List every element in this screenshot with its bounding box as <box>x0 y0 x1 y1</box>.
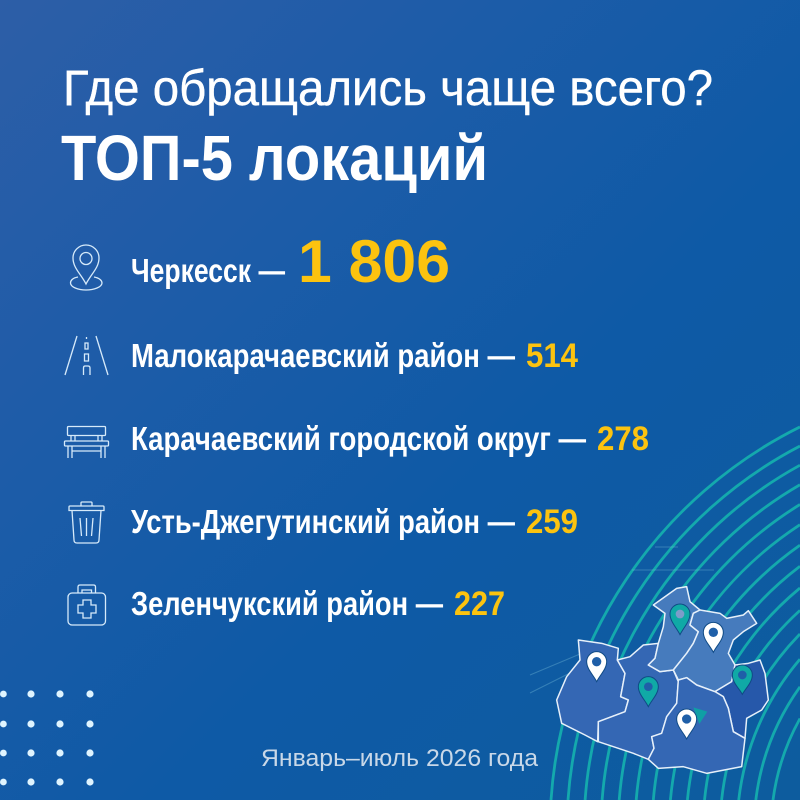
label: Зеленчукский район — <box>131 585 443 622</box>
title: Где обращались чаще всего? <box>63 60 713 116</box>
region central <box>598 643 678 759</box>
icon: trash bin <box>69 502 104 543</box>
pin: teal central <box>638 677 658 707</box>
decorative dot grid <box>0 690 94 786</box>
value: 514 <box>526 337 578 375</box>
region northeast <box>673 610 757 692</box>
icon: location pin <box>70 245 102 290</box>
label: Малокарачаевский район — <box>131 337 515 374</box>
subtitle: ТОП-5 локаций <box>61 122 488 194</box>
value: 227 <box>454 585 505 623</box>
icon: first aid kit <box>68 585 106 625</box>
icon: bench <box>64 426 108 458</box>
label: Карачаевский городской округ — <box>131 420 586 457</box>
row: Зеленчукский район <box>68 585 505 625</box>
pin: teal small behind south <box>693 707 707 724</box>
value: 259 <box>526 503 578 541</box>
pin: teal north <box>670 604 690 635</box>
value: 278 <box>597 420 649 458</box>
icon: road <box>65 336 108 375</box>
footer date: Январь–июль 2026 года <box>261 745 539 772</box>
row: Черкесск <box>70 228 450 295</box>
pin: white northeast <box>703 622 723 652</box>
label: Усть-Джегутинский район — <box>131 503 515 540</box>
region west <box>557 640 628 742</box>
pin: teal east <box>732 665 752 694</box>
value: 1 806 <box>298 228 450 295</box>
decorative concentric arcs <box>551 427 800 800</box>
pin: white west <box>587 652 607 682</box>
map of regions with pins <box>557 587 768 773</box>
label: Черкесск — <box>131 252 285 289</box>
region north <box>648 587 700 672</box>
pin: white south <box>677 709 697 739</box>
region east <box>715 660 768 738</box>
row: Карачаевский городской округ <box>64 420 649 458</box>
row: Малокарачаевский район <box>65 336 578 375</box>
region south <box>648 678 745 773</box>
row: Усть-Джегутинский район <box>69 502 578 543</box>
